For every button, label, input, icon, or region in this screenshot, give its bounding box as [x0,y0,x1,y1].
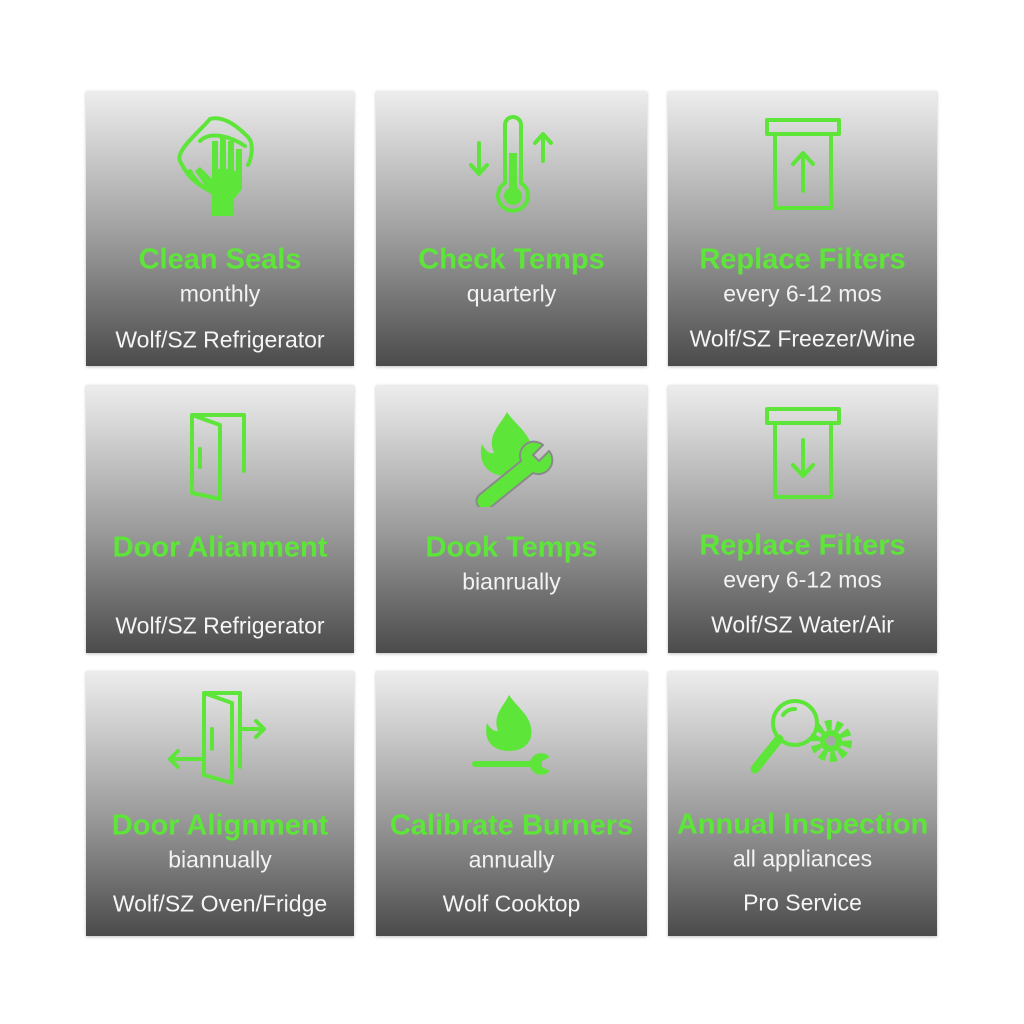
frequency: annually [469,846,554,872]
icon: filter up [765,118,841,210]
frequency: all appliances [733,846,872,872]
appliance: Wolf/SZ Refrigerator [115,326,325,352]
title: Calibrate Burners [390,810,633,842]
icon: thermometer [468,115,554,213]
card: replace filters freezer [668,91,937,366]
card: clean seals [86,91,354,366]
frequency: quarterly [467,280,556,306]
card: door alignment 2 [86,671,354,936]
title: Clean Seals [139,244,301,276]
icon: magnifier and gear [750,699,852,774]
title: Door Alianment [113,532,327,564]
icon: flame and wrench [472,695,550,775]
title: Annual Inspection [677,808,928,840]
icon: hand with cloth [177,116,254,216]
title: Replace Filters [699,530,906,562]
icon: door with arrows [168,691,266,785]
icon: flame and wrench [476,412,554,507]
card: calibrate burners [376,671,647,936]
card: dook temps [376,385,647,653]
frequency: every 6-12 mos [723,280,882,306]
frequency: every 6-12 mos [723,566,882,592]
card: check temps [376,91,647,366]
appliance: Wolf Cooktop [443,890,580,916]
card: door alignment 1 [86,385,354,653]
icon: door [190,413,246,501]
frequency: bianrually [462,568,561,594]
title: Door Alignment [112,810,328,842]
appliance: Pro Service [743,890,862,916]
appliance: Wolf/SZ Refrigerator [115,612,325,638]
card: annual inspection [668,671,937,936]
appliance: Wolf/SZ Freezer/Wine [690,326,915,352]
title: Check Temps [418,244,605,276]
appliance: Wolf/SZ Oven/Fridge [113,890,327,916]
title: Dook Temps [426,532,597,564]
frequency: biannually [168,846,272,872]
frequency: monthly [180,280,260,306]
icon: filter down [765,407,841,499]
title: Replace Filters [699,244,906,276]
appliance: Wolf/SZ Water/Air [711,612,894,638]
card: replace filters water [668,385,937,653]
